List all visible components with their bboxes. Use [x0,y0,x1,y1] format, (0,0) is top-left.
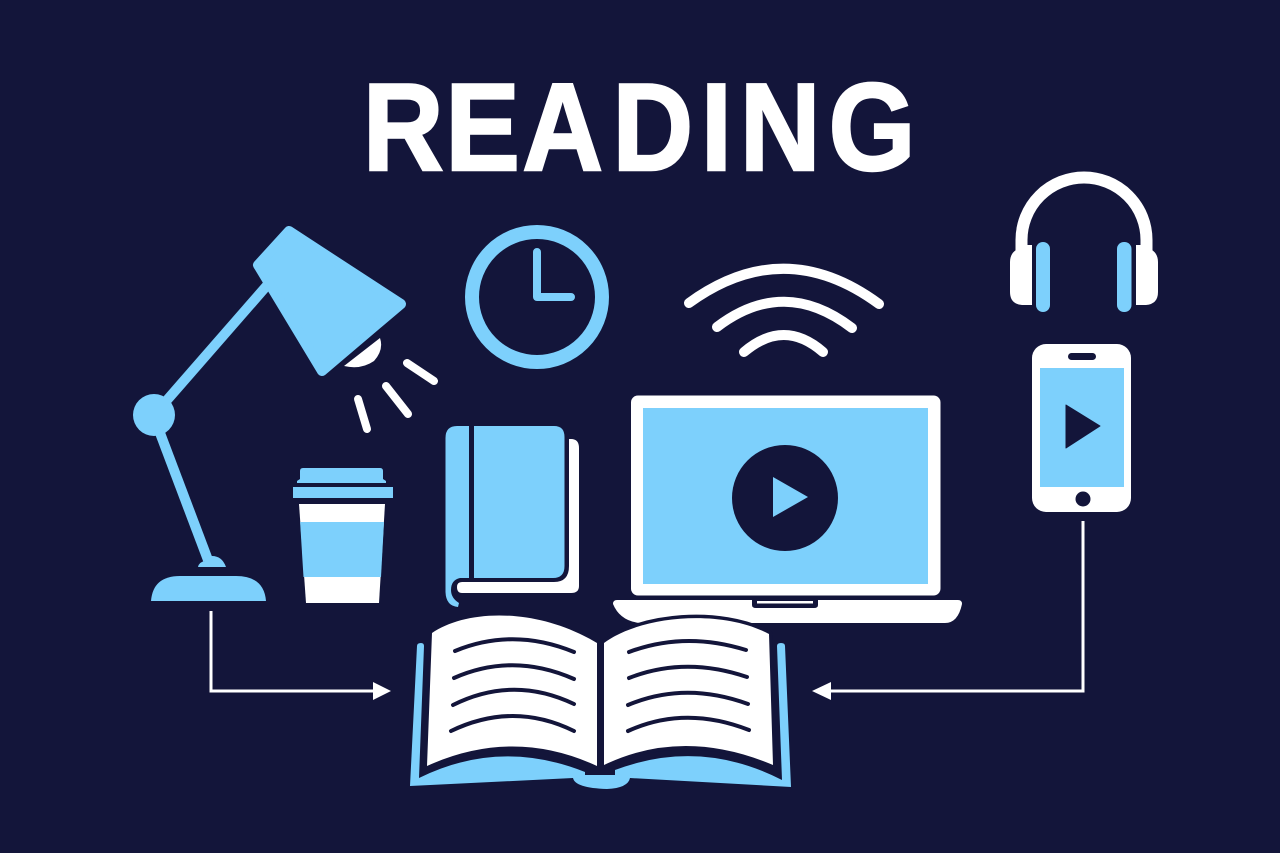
icon: closed notebook [446,426,579,607]
title: READING [363,58,915,196]
icon: open book [410,615,791,789]
icon: headphones [1010,178,1158,312]
text lines [451,639,749,731]
icon: smartphone with video [1032,344,1131,512]
icon: coffee cup [293,468,393,603]
icon: clock [472,232,602,362]
icon: desk lamp [133,231,434,601]
icon: wifi signal [689,269,879,352]
book cover [410,643,791,789]
arrow: lamp to open book [211,611,391,700]
right page [604,618,773,765]
left page [427,615,597,766]
icon: laptop with video [613,396,962,623]
arrow: phone to open book [812,521,1083,700]
